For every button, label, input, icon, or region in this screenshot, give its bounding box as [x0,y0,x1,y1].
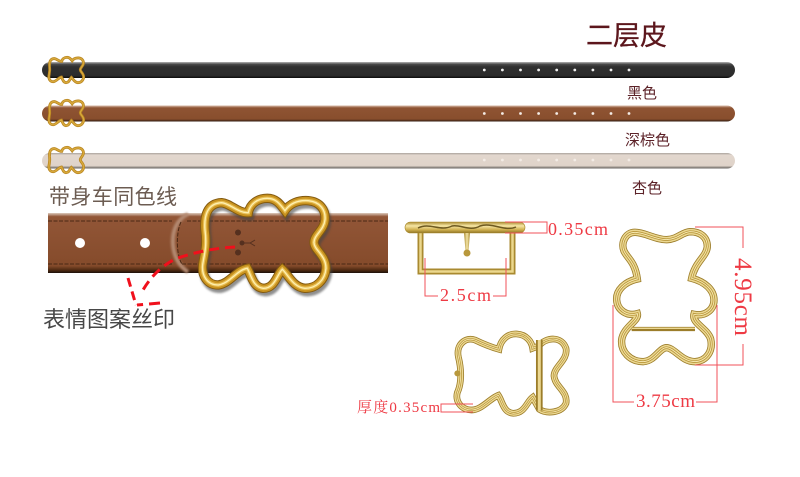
icon: top-view buckle [405,222,525,272]
brown belt [42,106,735,122]
dimension: 0.35cm: 0.35cm [548,219,608,239]
icon: black belt buckle [49,57,84,83]
label: black: 黑色 [627,85,657,102]
dimension: 3.75cm: 3.75cm [636,391,695,412]
icon: beige belt buckle [49,147,84,173]
dimension: 4.95cm: 4.95cm [729,258,756,337]
printed face [235,230,255,256]
dimension: 4.95cm [695,227,756,365]
beige belt [42,153,735,168]
label: dark brown: 深棕色 [625,132,670,149]
dimension: 3.75cm [613,305,717,412]
icon: side-view buckle [454,334,566,413]
beige belt holes [483,159,630,161]
stitching [48,221,388,264]
dimension: 2.5cm [425,258,506,305]
black belt [42,62,735,78]
icon: large buckle [203,198,328,292]
keeper fold [173,214,188,272]
black belt holes [483,69,630,71]
label: apricot: 杏色 [632,180,662,197]
belt close-up [48,213,388,273]
heading: stitching note: 带身车同色线 [49,186,177,209]
icon: brown belt buckle [49,100,84,126]
brown belt holes [483,112,630,115]
buckle bar engraving [418,225,516,228]
dimension: thickness [357,398,473,416]
dimension: 2.5cm: 2.5cm [440,285,491,305]
belt holes [75,238,150,248]
title: 二层皮 [586,21,667,51]
dimension: 0.35cm [505,219,608,239]
buckle pin [464,233,470,251]
caption: silk print: 表情图案丝印 [43,307,175,332]
dimension: thickness: 厚度0.35cm [357,398,440,416]
red dashed arrow [128,247,235,305]
icon: bear-shaped buckle [617,232,714,362]
